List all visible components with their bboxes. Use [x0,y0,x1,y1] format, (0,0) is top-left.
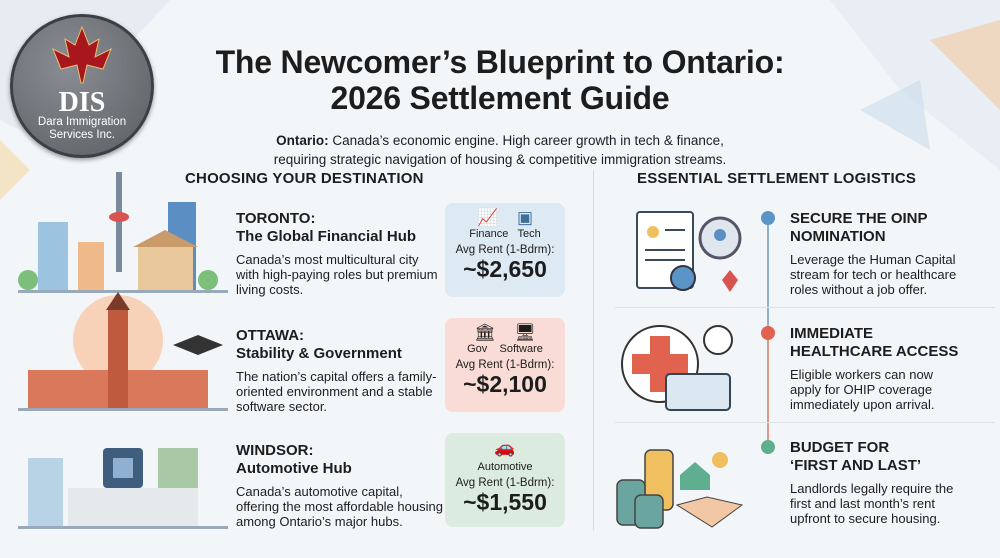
rent box: windsor: Avg Rent (1-Bdrm): [456,477,554,489]
subtitle: Ontario: Canada’s economic engine. High career growth in tech & finance, [276,133,724,148]
icon: healthcare [621,325,733,411]
icons: gov software: 🏛 🖥 [474,323,536,342]
step: budget: ‘FIRST AND LAST’ [790,457,921,474]
logo: DIS [59,87,105,118]
city: toronto: Canada’s most multicultural city with high-paying roles but premium living costs. [236,252,438,297]
city: windsor: Canada’s automotive capital, offering the most affordable housing among Ontario’s major hubs. [236,484,443,529]
rent box: ottawa: ~$2,100 [463,371,547,397]
timeline [761,211,775,454]
city: windsor: WINDSOR: [236,442,314,459]
title [216,44,784,116]
rent box: ottawa: Gov Software [467,343,543,355]
step: oinp: Leverage the Human Capital stream for tech or healthcare roles without a job offer. [790,252,956,297]
step: healthcare: Eligible workers can now apply for OHIP coverage immediately upon arrival. [790,367,935,412]
step: budget: BUDGET FOR [790,439,889,456]
title: The Newcomer’s Blueprint to Ontario: [216,44,784,80]
rent box: toronto: Finance Tech [469,228,541,240]
step: healthcare [790,325,958,412]
city: toronto: TORONTO: [236,210,315,227]
rent box: windsor [445,433,565,527]
divider [593,170,594,530]
rent box: windsor: ~$1,550 [463,489,547,515]
step: oinp [790,210,956,297]
title: 2026 Settlement Guide [330,80,670,116]
icon: car: 🚗 [494,438,516,457]
illustration: ottawa parliament [18,292,228,411]
rent box: toronto [445,203,565,297]
subtitle [274,133,726,167]
step: budget [790,439,953,526]
city: toronto: The Global Financial Hub [236,228,416,245]
logo: Dara Immigration [38,116,126,128]
city: windsor: Automotive Hub [236,460,352,477]
icon: coins keys handshake [616,449,744,529]
illustration: toronto skyline [18,172,228,293]
city: toronto [236,210,438,297]
rent box: toronto: Avg Rent (1-Bdrm): [456,244,554,256]
icons: finance tech: 📈 ▣ [477,208,533,227]
icon: maple leaf [52,26,112,84]
heading: essential settlement logistics: ESSENTIAL SETTLEMENT LOGISTICS [637,170,916,187]
subtitle: requiring strategic navigation of housing & competitive immigration streams. [274,152,726,167]
illustration: windsor tech [18,448,228,529]
icon: documents gear [636,211,742,292]
logo [10,14,154,158]
city: ottawa [236,327,436,414]
city: windsor [236,442,443,529]
step: oinp: SECURE THE OINP [790,210,928,227]
step: budget: Landlords legally require the first and last month’s rent upfront to secure housing. [790,481,953,526]
logo: Services Inc. [49,129,115,141]
rent box: toronto: ~$2,650 [463,256,547,282]
rent box: ottawa: Avg Rent (1-Bdrm): [456,359,554,371]
step: healthcare: IMMEDIATE [790,325,873,342]
rent box: ottawa [445,318,565,412]
heading: choosing your destination: CHOOSING YOUR DESTINATION [185,170,424,187]
city: ottawa: OTTAWA: [236,327,304,344]
rent box: windsor: Automotive [477,461,533,473]
step: oinp: NOMINATION [790,228,886,245]
step: healthcare: HEALTHCARE ACCESS [790,343,958,360]
city: ottawa: Stability & Government [236,345,402,362]
dividers [615,307,995,308]
city: ottawa: The nation’s capital offers a family-oriented environment and a stable software sector. [236,369,436,414]
